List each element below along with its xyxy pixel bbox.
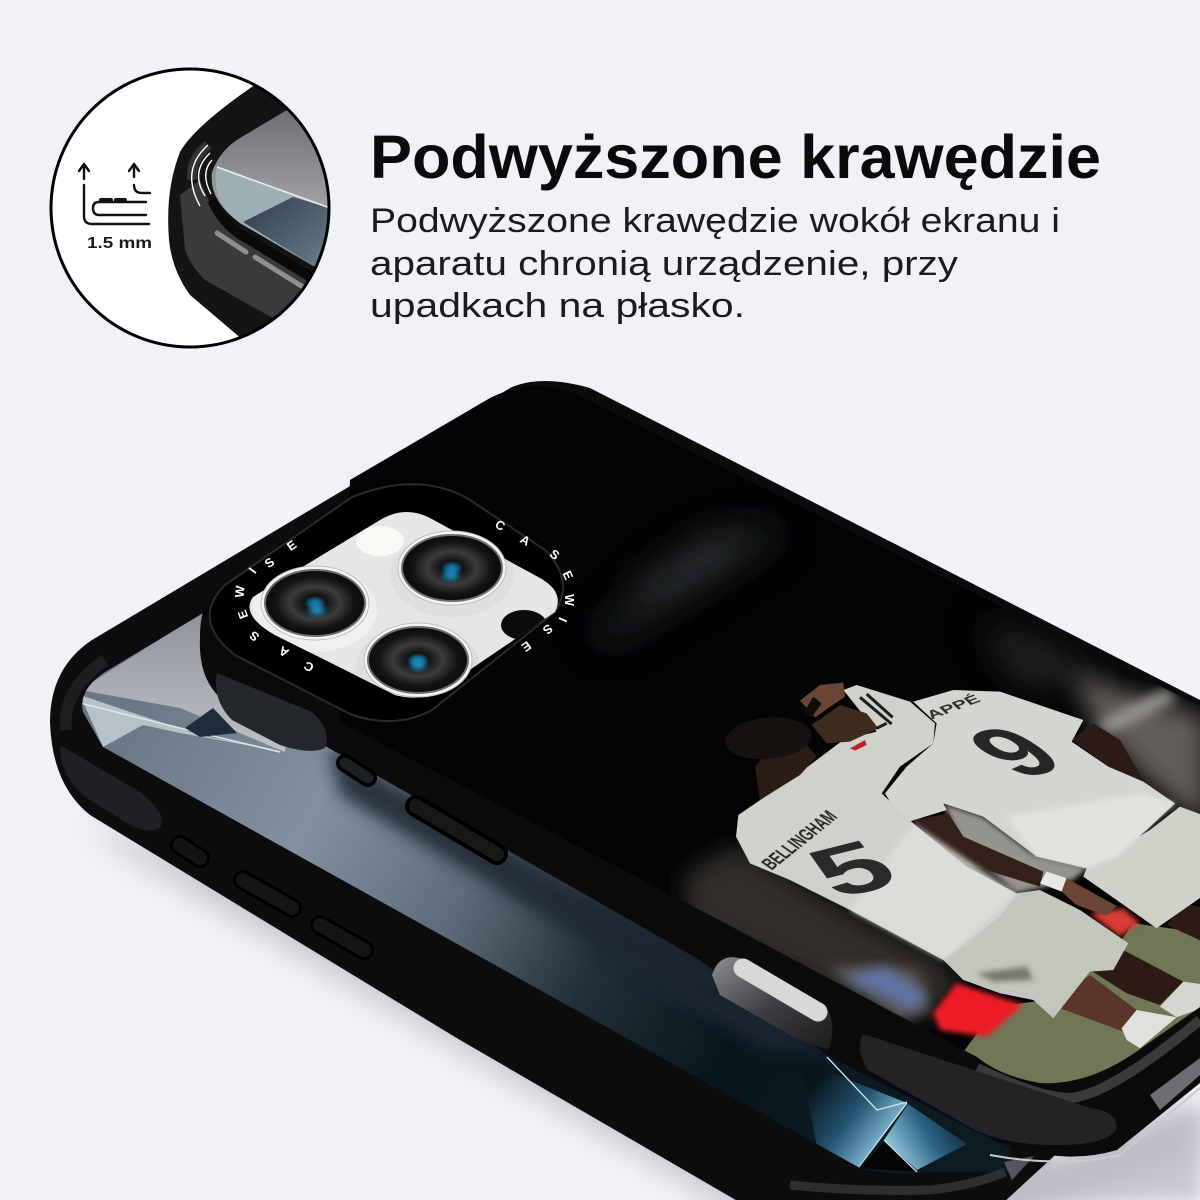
CASEWISE ring text: C bbox=[493, 517, 507, 534]
Mbappe head and hand bbox=[800, 683, 878, 743]
bright streak in stands bbox=[1097, 688, 1177, 733]
inset close-up of case corner bbox=[168, 80, 345, 345]
player 5 jersey lower shading bbox=[850, 823, 1017, 960]
lower phone volume down face bbox=[320, 925, 364, 950]
blurred grey gap between players bbox=[943, 803, 1087, 893]
inset white arcs bbox=[192, 145, 212, 206]
upper phone camera-side grip pad bbox=[216, 673, 327, 751]
blurred stands right bbox=[1073, 673, 1200, 827]
lower phone grip pad bbox=[60, 745, 162, 831]
icon: raised edge diagram bbox=[79, 164, 150, 224]
player 5 arm bbox=[913, 813, 1043, 887]
inset circle: raised edge close-up bbox=[51, 69, 345, 347]
camera module bbox=[210, 484, 580, 721]
lower phone side button small bbox=[180, 845, 200, 858]
player 9 jersey lower shading bbox=[1007, 793, 1175, 868]
description text bbox=[370, 202, 1060, 325]
speaker grille bbox=[1150, 1058, 1200, 1110]
drop shadows bbox=[80, 820, 1200, 1200]
upper phone mic inner bbox=[345, 763, 368, 778]
CASEWISE ring text: S bbox=[262, 555, 277, 571]
underside shadow of upper phone bbox=[327, 745, 830, 1055]
blurred blue board front bbox=[843, 967, 927, 1010]
lower phone volume down button bbox=[320, 925, 364, 950]
lower phone bottom bevel bbox=[790, 1172, 1005, 1190]
lens plateau bbox=[253, 568, 377, 652]
lens top bbox=[398, 531, 506, 605]
blue light fan bbox=[800, 1057, 967, 1172]
CASEWISE ring text: C bbox=[302, 658, 316, 675]
green pitch bbox=[960, 923, 1200, 1093]
CASEWISE ring text: W bbox=[562, 594, 576, 606]
blurred stands lower left bbox=[687, 847, 960, 1023]
CASEWISE ring text bbox=[233, 517, 576, 675]
microphone hole bbox=[501, 610, 547, 640]
lower phone volume up button bbox=[243, 880, 292, 908]
red advertising board bbox=[933, 983, 1023, 1037]
player 9 jersey bbox=[885, 690, 1175, 868]
Bellingham head bbox=[723, 714, 817, 800]
lens plateau second bbox=[390, 533, 514, 617]
upper phone screen artwork bbox=[350, 392, 1200, 1084]
CASEWISE ring text: E bbox=[519, 638, 534, 654]
CASEWISE ring text: W bbox=[233, 585, 248, 598]
description text: aparatu chronią urządzenie, przy bbox=[370, 245, 958, 283]
shirt number 9: 9 bbox=[942, 712, 1090, 792]
player 5 wristband bbox=[1040, 872, 1067, 892]
lower phone clear edge bbox=[1003, 1160, 1052, 1200]
CASEWISE ring text: E bbox=[560, 569, 576, 582]
CASEWISE ring text: S bbox=[540, 621, 555, 637]
player legs bbox=[1047, 903, 1200, 1048]
upper phone side button bbox=[416, 806, 497, 854]
lower phone corner highlight bbox=[66, 660, 105, 730]
inset circle border bbox=[51, 69, 329, 347]
shirt name BELLINGHAM: BELLINGHAM bbox=[758, 807, 842, 873]
red board behind hand bbox=[1090, 908, 1140, 937]
camera bump outer frame bbox=[210, 484, 563, 721]
lens left bbox=[261, 566, 369, 640]
player 9 shorts bbox=[1083, 807, 1200, 928]
stadium blurred background bbox=[590, 520, 1120, 680]
description text: upadkach na płasko. bbox=[370, 287, 745, 325]
CASEWISE ring text: S bbox=[547, 547, 562, 563]
lower phone charging port bbox=[1004, 1156, 1034, 1180]
lens bottom bbox=[364, 623, 472, 697]
clear case rim bbox=[990, 1088, 1200, 1162]
player 5 shorts bbox=[943, 890, 1128, 1018]
flash bbox=[356, 526, 404, 556]
lower phone screen bbox=[82, 613, 1010, 1174]
lower phone volume up face bbox=[243, 880, 292, 908]
upper phone side mic slot bbox=[345, 763, 368, 778]
players illustration bbox=[687, 673, 1200, 1093]
player 9 arm bbox=[1072, 723, 1145, 783]
blurred stands near edge bbox=[827, 967, 930, 1020]
camera bump bevel bbox=[210, 484, 563, 721]
camera window bbox=[250, 512, 558, 698]
sleeve cuff stripes bbox=[860, 694, 893, 728]
lens plateau third bbox=[356, 625, 480, 709]
upper phone grip pad bbox=[860, 1034, 1116, 1145]
CASEWISE ring text: A bbox=[518, 532, 532, 549]
CASEWISE ring text: S bbox=[247, 628, 262, 644]
shirt number 5: 5 bbox=[789, 826, 915, 913]
badge bbox=[850, 740, 867, 751]
CASEWISE ring text: A bbox=[277, 643, 291, 660]
inset label: 1.5 mm bbox=[87, 235, 152, 252]
shorts grass stain bbox=[977, 967, 1033, 982]
player 5 hand bbox=[1062, 878, 1117, 916]
player 5 jersey bbox=[736, 685, 1017, 960]
description text: Podwyższone krawędzie wokół ekranu i bbox=[370, 202, 1060, 240]
CASEWISE ring text: E bbox=[235, 608, 251, 621]
lower phone bumper bbox=[50, 470, 1060, 1200]
silver action button cutout bbox=[712, 957, 832, 1050]
upper phone side button face bbox=[416, 806, 497, 854]
upper phone bumper bevel bbox=[977, 1020, 1200, 1098]
CASEWISE ring text: E bbox=[284, 538, 299, 554]
silver action button bbox=[743, 968, 818, 1012]
shirt name APPE: APPÉ bbox=[922, 692, 984, 722]
title: Podwyższone krawędzie bbox=[370, 123, 1101, 191]
upper phone bumper bbox=[200, 381, 1200, 1157]
phone: lower case bbox=[50, 470, 1060, 1200]
CASEWISE ring text: I bbox=[556, 615, 570, 624]
phone: upper case bbox=[200, 360, 1200, 1162]
CASEWISE ring text: I bbox=[246, 565, 259, 576]
lower phone side button face bbox=[180, 845, 200, 858]
inset circle fill bbox=[51, 69, 329, 347]
